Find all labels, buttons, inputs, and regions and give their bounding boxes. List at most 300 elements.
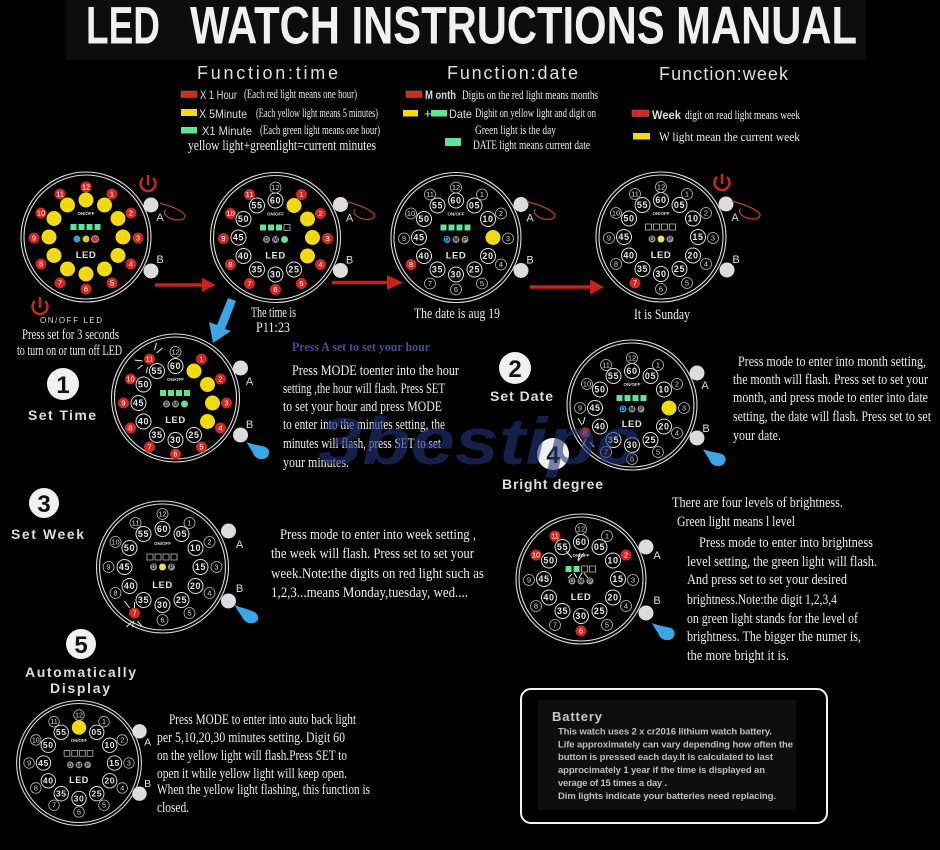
watch: brightness: ON/OFF bbox=[572, 553, 590, 558]
watch: it is Sunday: 11 bbox=[631, 190, 639, 198]
legend: function time: X 1 Hour bbox=[200, 88, 237, 102]
watch: set week: P bbox=[169, 565, 174, 571]
caption: power on off: Press set for 3 seconds bbox=[22, 327, 119, 343]
watch: set week: A bbox=[236, 539, 244, 551]
watch: auto display: 05 bbox=[91, 727, 102, 737]
watch: auto display: 3 bbox=[127, 758, 131, 767]
watch: set week: 5 bbox=[187, 608, 192, 618]
watch: the date is aug 19: 9 bbox=[402, 234, 406, 243]
watch: auto display: 4 bbox=[120, 783, 124, 792]
watch: it is Sunday: B bbox=[732, 254, 740, 266]
panel: battery: This watch uses 2 x cr2016 lithium watch battery. bbox=[558, 726, 772, 738]
step 5 badge bbox=[66, 629, 96, 659]
text: brightness instructions: And press set to set your desired bbox=[687, 572, 848, 588]
watch: set hour: 11 bbox=[146, 354, 153, 364]
text: auto display instructions: Press MODE to enter into auto back light bbox=[169, 712, 356, 728]
watch: set date: 40 bbox=[594, 422, 606, 432]
watch: set hour: 12 bbox=[171, 348, 180, 356]
watch: the time is P11:23: 05 bbox=[289, 200, 299, 210]
watch: the time is P11:23: 3 bbox=[325, 234, 330, 243]
watch: the date is aug 19: 3 bbox=[506, 234, 510, 243]
watch: the date is aug 19: A bbox=[526, 212, 534, 224]
watch: set week: 55 bbox=[138, 529, 149, 539]
watch: the date is aug 19: 20 bbox=[482, 251, 494, 261]
watch: set week bbox=[96, 501, 258, 633]
watch: set date: 9 bbox=[578, 404, 582, 412]
watch: set date: 15 bbox=[664, 403, 674, 413]
watch: all lights on: 55 bbox=[62, 200, 73, 210]
watch: set date: 10 bbox=[583, 380, 591, 388]
watch: it is Sunday: 7 bbox=[633, 278, 637, 288]
watch: it is Sunday: 15 bbox=[692, 232, 704, 242]
caption: power on off: to turn on or turn off LED bbox=[17, 343, 122, 359]
watch: the time is P11:23: 10 bbox=[302, 214, 313, 224]
watch: brightness: 20 bbox=[607, 592, 619, 602]
watch: brightness: 40 bbox=[543, 592, 555, 602]
watch: it is Sunday: 3 bbox=[711, 234, 715, 242]
watch: set date: 6 bbox=[630, 454, 634, 464]
watch: set hour: A bbox=[246, 376, 254, 388]
watch: the date is aug 19: 30 bbox=[450, 270, 462, 280]
watch: the time is P11:23: 60 bbox=[270, 196, 281, 206]
watch: auto display: 15 bbox=[109, 758, 120, 768]
step 1 badge: 1 bbox=[56, 372, 70, 399]
watch: set date: B bbox=[702, 423, 710, 435]
note: press A: Press A set to set your hour bbox=[292, 340, 430, 354]
legend: function time: (Each red light means one hour) bbox=[244, 86, 357, 101]
legend: function date: Digits on the red light means months bbox=[462, 87, 598, 102]
text: brightness instructions: There are four levels of brightness. bbox=[672, 495, 843, 511]
heading: automatically display bbox=[25, 664, 136, 696]
watch: all lights on: 9 bbox=[32, 234, 36, 242]
watch: set week: 45 bbox=[119, 562, 130, 572]
legend: function date: Function:date bbox=[447, 63, 578, 83]
panel: battery: verage of 15 times a day . bbox=[558, 778, 667, 789]
watch: the time is P11:23: ON/OFF bbox=[267, 212, 284, 216]
text: auto display instructions: on the yellow light will flash.Press SET to bbox=[157, 748, 347, 764]
watch: it is Sunday: LED bbox=[651, 250, 671, 261]
watch: brightness: 10 bbox=[532, 550, 540, 560]
text: set time instructions: setting ,the hour will flash. Press SET bbox=[283, 381, 445, 397]
watch: set hour bbox=[112, 334, 269, 462]
watch: set hour: ON/OFF bbox=[167, 377, 184, 382]
text: set week instructions: Press mode to enter into week setting , bbox=[280, 527, 476, 543]
watch: the date is aug 19: 35 bbox=[432, 264, 443, 274]
legend: function date: + bbox=[424, 106, 432, 121]
watch: set week: 7 bbox=[132, 608, 137, 618]
watch: the time is P11:23: D bbox=[264, 238, 269, 244]
watch: set date: 55 bbox=[608, 371, 619, 381]
panel: battery: Battery bbox=[552, 709, 603, 724]
watch: the date is aug 19: 10 bbox=[407, 209, 415, 218]
text: brightness instructions: brightness. The bigger the numer is, bbox=[687, 629, 861, 645]
watch: it is Sunday bbox=[596, 172, 760, 302]
legend: function week bbox=[632, 64, 800, 144]
watch: auto display: D bbox=[68, 763, 72, 769]
text: brightness instructions: brightness.Note:the digit 1,2,3,4 bbox=[687, 592, 838, 608]
watch: it is Sunday: 30 bbox=[655, 269, 667, 279]
watch: brightness: 30 bbox=[575, 611, 587, 621]
watch: the date is aug 19: D bbox=[445, 238, 450, 244]
heading: set week: Set Week bbox=[11, 526, 84, 542]
watch: set date: 35 bbox=[608, 435, 619, 445]
icon: power symbol bottom left bbox=[33, 297, 48, 314]
watch: set week: 11 bbox=[132, 518, 139, 528]
watch: auto display: 2 bbox=[120, 735, 124, 744]
text: brightness instructions: Press mode to enter into brightness bbox=[699, 535, 873, 551]
watch: auto display: 11 bbox=[50, 717, 58, 726]
watch: the date is aug 19: 40 bbox=[418, 251, 430, 261]
watch: auto display: 1 bbox=[102, 717, 106, 726]
watch: set hour: 7 bbox=[147, 442, 152, 452]
watch: set hour: 10 bbox=[202, 380, 213, 390]
watch: all lights on: 3 bbox=[136, 234, 140, 242]
watch: the time is P11:23: B bbox=[346, 254, 353, 266]
watch: the time is P11:23: 30 bbox=[270, 270, 281, 280]
watch: the date is aug 19: 5 bbox=[480, 279, 484, 288]
watch: auto display: 55 bbox=[56, 727, 67, 737]
watch: set date: 8 bbox=[583, 428, 587, 438]
watch: the time is P11:23: 50 bbox=[238, 214, 249, 224]
watch: set week: 3 bbox=[214, 562, 219, 572]
watch: all lights on: A bbox=[156, 212, 164, 224]
watch: all lights on: 20 bbox=[113, 250, 123, 260]
watch: the time is P11:23: LED bbox=[265, 250, 286, 262]
caption: the time: P11:23 bbox=[256, 320, 290, 336]
panel: battery: Life approximately can vary depending how often the bbox=[558, 740, 793, 750]
watch: the time is P11:23: 7 bbox=[247, 279, 252, 288]
watch: brightness: 2 bbox=[624, 550, 628, 560]
watch: set hour: 40 bbox=[138, 416, 149, 426]
watch: brightness: D bbox=[570, 579, 575, 585]
watch: the date is aug 19: 8 bbox=[409, 260, 413, 269]
heading: automatically display: Automatically bbox=[25, 664, 136, 680]
watch: it is Sunday: 9 bbox=[607, 234, 611, 242]
watch: it is Sunday: 4 bbox=[704, 260, 708, 268]
watch: it is Sunday: P bbox=[668, 237, 672, 243]
legend: function date bbox=[403, 63, 598, 152]
legend: function time: Function:time bbox=[197, 63, 338, 83]
text: set week instructions: the week will flash. Press set to set your bbox=[271, 546, 474, 562]
watch: brightness: 4 bbox=[624, 602, 628, 610]
text: set time instructions: to enter into the minutes setting, the bbox=[283, 417, 445, 433]
watch: set week: 6 bbox=[160, 616, 165, 624]
watch: brightness: LED bbox=[571, 592, 591, 603]
legend: function date: Green light is the day bbox=[475, 122, 556, 137]
step 4 badge bbox=[537, 438, 569, 470]
watch: the date is aug 19: 2 bbox=[499, 209, 503, 218]
watch: all lights on: 12 bbox=[82, 182, 90, 192]
watch: set hour: B bbox=[246, 419, 253, 431]
watch: set date: P bbox=[639, 407, 643, 413]
watch: set hour: 8 bbox=[128, 424, 133, 432]
watch: brightness: 8 bbox=[534, 602, 538, 610]
watch: set week: 8 bbox=[113, 588, 118, 598]
watch: set date: 50 bbox=[594, 384, 606, 394]
watch: all lights on: 6 bbox=[84, 284, 88, 294]
watch: the time is P11:23: 12 bbox=[271, 183, 280, 192]
watch: set hour: 20 bbox=[202, 416, 213, 426]
watch: it is Sunday: 8 bbox=[614, 260, 618, 268]
text: set date instructions bbox=[733, 354, 931, 444]
watch: all lights on: 5 bbox=[110, 278, 114, 288]
icon: power symbol top left bbox=[140, 175, 156, 191]
watch: the date is aug 19: 25 bbox=[469, 264, 480, 274]
text: set week instructions bbox=[271, 527, 484, 601]
watch: the date is aug 19: 12 bbox=[452, 183, 460, 192]
watch: set week: 10 bbox=[111, 538, 120, 546]
watch: all lights on: ON/OFF bbox=[78, 211, 95, 216]
text: set time instructions: to set your hour and press MODE bbox=[283, 399, 442, 415]
watch: the time is P11:23: 10 bbox=[226, 209, 235, 218]
arrow: step one to two bbox=[155, 278, 216, 292]
watch: the time is P11:23: 40 bbox=[238, 251, 249, 261]
text: set time instructions: your minutes. bbox=[283, 455, 349, 471]
watch: set date: A bbox=[701, 380, 709, 392]
watch: auto display: 35 bbox=[56, 789, 67, 799]
caption: power on off: ON/OFF LED bbox=[40, 316, 102, 325]
step 2 badge: 2 bbox=[508, 356, 522, 383]
watch: all lights on: 35 bbox=[62, 264, 73, 274]
watch: auto display: 5 bbox=[102, 801, 106, 810]
watch: the time is P11:23: M bbox=[273, 238, 278, 244]
watch: the date is aug 19: 6 bbox=[454, 285, 458, 294]
text: auto display instructions: open it while yellow light will keep open. bbox=[157, 766, 347, 782]
text: set date instructions: your date. bbox=[733, 428, 781, 444]
watch: brightness: 05 bbox=[594, 542, 605, 552]
watch: auto display: 6 bbox=[77, 807, 81, 816]
legend: function date: DATE light means current date bbox=[473, 137, 590, 152]
watch: brightness: 35 bbox=[557, 606, 568, 616]
watch: set date: 25 bbox=[645, 435, 656, 445]
watch: set week: 2 bbox=[207, 538, 212, 546]
text: brightness instructions: level setting, the green light will flash. bbox=[687, 554, 877, 570]
legend: function week: W light mean the current week bbox=[659, 129, 800, 144]
text: auto display instructions bbox=[157, 712, 370, 816]
watch: the date is aug 19: B bbox=[526, 254, 534, 266]
watch: all lights on: 2 bbox=[129, 208, 133, 218]
watch: set hour: 2 bbox=[218, 374, 223, 384]
watch: the date is aug 19: 50 bbox=[418, 214, 430, 224]
watch: the time is P11:23: 6 bbox=[273, 285, 278, 294]
panel: battery: approcimately 1 year if the time is displayed an bbox=[558, 765, 765, 776]
watch: set date: 05 bbox=[645, 371, 656, 381]
watch: auto display: 9 bbox=[27, 758, 31, 767]
watch: set hour: 9 bbox=[121, 398, 126, 408]
watch: it is Sunday: 25 bbox=[674, 264, 685, 274]
watch: brightness: 1 bbox=[605, 532, 609, 540]
watch: the date is aug 19: P bbox=[463, 238, 467, 244]
watch: all lights on: 15 bbox=[118, 232, 128, 242]
watch: all lights on: B bbox=[156, 254, 164, 266]
watch: brightness: P bbox=[588, 579, 592, 585]
text: auto display instructions: closed. bbox=[157, 800, 189, 816]
legend: function time: yellow light+greenlight=current minutes bbox=[188, 138, 376, 154]
watch: it is Sunday: D bbox=[650, 237, 655, 243]
watch: brightness: 12 bbox=[577, 524, 585, 534]
watch: set hour: 15 bbox=[207, 398, 218, 408]
watch: the date is aug 19: 1 bbox=[480, 190, 484, 199]
watch: the time is P11:23: 35 bbox=[251, 264, 263, 274]
watch: set date: ON/OFF bbox=[624, 382, 641, 387]
legend: function week: digit on read light means week bbox=[685, 107, 800, 122]
watch: auto display: M bbox=[77, 763, 82, 769]
watch: auto display: 40 bbox=[43, 776, 54, 786]
watch: it is Sunday: 55 bbox=[637, 200, 648, 210]
watch: all lights on: 30 bbox=[81, 269, 91, 279]
watch: set date: 30 bbox=[626, 440, 638, 450]
watch: the time is P11:23: 15 bbox=[307, 232, 318, 242]
watch: set date: 10 bbox=[658, 384, 670, 394]
watch: set date: M bbox=[630, 407, 634, 413]
watch: the date is aug 19: 60 bbox=[450, 196, 462, 206]
watch: it is Sunday: ON/OFF bbox=[652, 211, 670, 216]
watch: auto display: 30 bbox=[74, 793, 84, 803]
watch: all lights on: 40 bbox=[49, 250, 59, 260]
watch: set week: 50 bbox=[124, 543, 135, 553]
legend: function time bbox=[181, 63, 380, 154]
watch: set hour: 5 bbox=[199, 442, 204, 452]
watch: set week: B bbox=[236, 583, 243, 595]
watch: set week: 15 bbox=[195, 562, 206, 572]
watch: set hour: D bbox=[164, 402, 169, 408]
panel: battery: Dim lights indicate your batteries need replacing. bbox=[558, 791, 776, 802]
watch: the time is P11:23: 1 bbox=[299, 190, 304, 199]
watch: set date: 7 bbox=[604, 448, 608, 456]
watch: the date is aug 19: 05 bbox=[469, 200, 480, 210]
watch: the date is aug 19: 45 bbox=[413, 232, 425, 242]
watch: set date: 3 bbox=[682, 404, 686, 412]
watch: it is Sunday: 35 bbox=[637, 264, 648, 274]
text: brightness instructions: the more bright it is. bbox=[687, 648, 789, 664]
watch: set hour: 60 bbox=[170, 361, 181, 371]
watch: auto display: 8 bbox=[34, 783, 38, 792]
legend: function time: X 5Minute bbox=[199, 107, 247, 121]
watch: the date is aug 19 bbox=[391, 172, 555, 302]
watch: auto display: B bbox=[144, 778, 151, 790]
watch: it is Sunday: 50 bbox=[623, 214, 635, 224]
watch: it is Sunday: 2 bbox=[704, 208, 708, 218]
watch: it is Sunday: 6 bbox=[659, 284, 663, 294]
watch: set hour: 35 bbox=[151, 430, 163, 440]
watch: the date is aug 19: ON/OFF bbox=[448, 212, 465, 216]
watch: the date is aug 19: LED bbox=[446, 250, 466, 262]
watch: the time is P11:23: 9 bbox=[221, 234, 226, 243]
watch: set week: 40 bbox=[124, 581, 135, 591]
watch: set date: 1 bbox=[656, 360, 660, 370]
watch: all lights on: 10 bbox=[37, 208, 45, 218]
watch: set hour: 3 bbox=[224, 398, 229, 408]
watch: set week: 60 bbox=[157, 524, 168, 534]
watch: the date is aug 19: M bbox=[454, 238, 458, 244]
step 1 badge bbox=[47, 368, 79, 400]
watch: it is Sunday: 05 bbox=[674, 200, 685, 210]
watch: all lights on: 8 bbox=[39, 260, 43, 268]
icon: power symbol sunday bbox=[715, 174, 730, 190]
step 2 badge bbox=[499, 352, 531, 384]
watch: brightness: 50 bbox=[543, 556, 555, 566]
text: set time instructions: Press MODE toenter into the hour bbox=[292, 363, 459, 379]
watch: set hour: 05 bbox=[189, 366, 199, 376]
arrow: step three to four bbox=[530, 280, 604, 294]
watch: it is Sunday: 5 bbox=[685, 278, 689, 288]
watch: it is Sunday: 40 bbox=[623, 250, 635, 260]
watch: set week: 25 bbox=[176, 595, 187, 605]
arrow: blue to set time bbox=[209, 298, 236, 343]
panel: battery bbox=[521, 689, 827, 823]
watch: set date: 60 bbox=[626, 366, 638, 376]
text: brightness instructions bbox=[672, 495, 877, 664]
watch: auto display: 7 bbox=[52, 801, 56, 810]
watch: set date: LED bbox=[622, 419, 642, 430]
watch: the time is P11:23 bbox=[210, 172, 375, 302]
watch: all lights on: 7 bbox=[58, 278, 62, 288]
watch: set hour: 1 bbox=[199, 354, 204, 364]
legend: function time: (Each yellow light means 5 minutes) bbox=[256, 105, 378, 120]
watch: auto display: 50 bbox=[43, 740, 54, 750]
watch: the date is aug 19: 55 bbox=[432, 200, 443, 210]
caption: the time bbox=[251, 305, 296, 336]
watch: auto display: 10 bbox=[32, 735, 40, 744]
watch: it is Sunday: 45 bbox=[618, 232, 630, 242]
watch: it is Sunday: A bbox=[731, 212, 739, 224]
watch: set hour: 4 bbox=[218, 424, 223, 432]
watch: set hour: M bbox=[173, 402, 178, 408]
legend: function time: (Each green light means one hour) bbox=[260, 122, 380, 137]
watch: the date is aug 19: 11 bbox=[426, 190, 434, 199]
watch: auto display: A bbox=[144, 737, 152, 749]
watch: set week: 12 bbox=[158, 510, 167, 518]
watch: set week: 9 bbox=[106, 562, 111, 572]
watch: auto display: 60 bbox=[74, 722, 84, 732]
watch: it is Sunday: 10 bbox=[687, 214, 699, 224]
watch: set week: 30 bbox=[157, 600, 168, 610]
legend: function week: Function:week bbox=[659, 64, 789, 84]
watch: set hour: LED bbox=[165, 415, 186, 426]
watch: set hour: 25 bbox=[188, 430, 200, 440]
watch: all lights on: 1 bbox=[110, 190, 114, 198]
watch: set week: 4 bbox=[207, 588, 212, 598]
caption: the time: The time is bbox=[251, 305, 296, 321]
watch: brightness: 55 bbox=[557, 542, 568, 552]
text: set week instructions: week.Note:the digits on red light such as bbox=[271, 566, 484, 582]
watch: auto display: LED bbox=[69, 775, 89, 785]
watch: set hour: 6 bbox=[173, 450, 178, 458]
watch: it is Sunday: 20 bbox=[687, 250, 699, 260]
watch: set week: D bbox=[151, 565, 156, 571]
watch: set date bbox=[567, 340, 726, 470]
legend: function date: Date bbox=[449, 107, 472, 121]
watch: auto display: 45 bbox=[38, 758, 49, 768]
watch: brightness: B bbox=[653, 595, 661, 607]
watch: set date: 45 bbox=[589, 403, 601, 413]
watch: set week: 05 bbox=[176, 529, 187, 539]
watch: it is Sunday: 12 bbox=[657, 182, 665, 192]
watch: brightness: 10 bbox=[607, 556, 619, 566]
heading: set date: Set Date bbox=[490, 388, 553, 404]
watch: all lights on: 25 bbox=[99, 264, 110, 274]
watch: it is Sunday: 1 bbox=[685, 190, 689, 198]
step 3 badge: 3 bbox=[37, 491, 51, 518]
watch: set date: 4 bbox=[675, 428, 679, 438]
watch: the time is P11:23: 45 bbox=[233, 232, 244, 242]
watch: brightness: 60 bbox=[575, 537, 587, 547]
watch: set hour: 30 bbox=[170, 435, 181, 445]
watch: set week: LED bbox=[152, 580, 173, 591]
watch: auto display: ON/OFF bbox=[71, 738, 88, 743]
watch: set date: 12 bbox=[628, 354, 636, 362]
watch: the date is aug 19: 4 bbox=[499, 260, 503, 269]
